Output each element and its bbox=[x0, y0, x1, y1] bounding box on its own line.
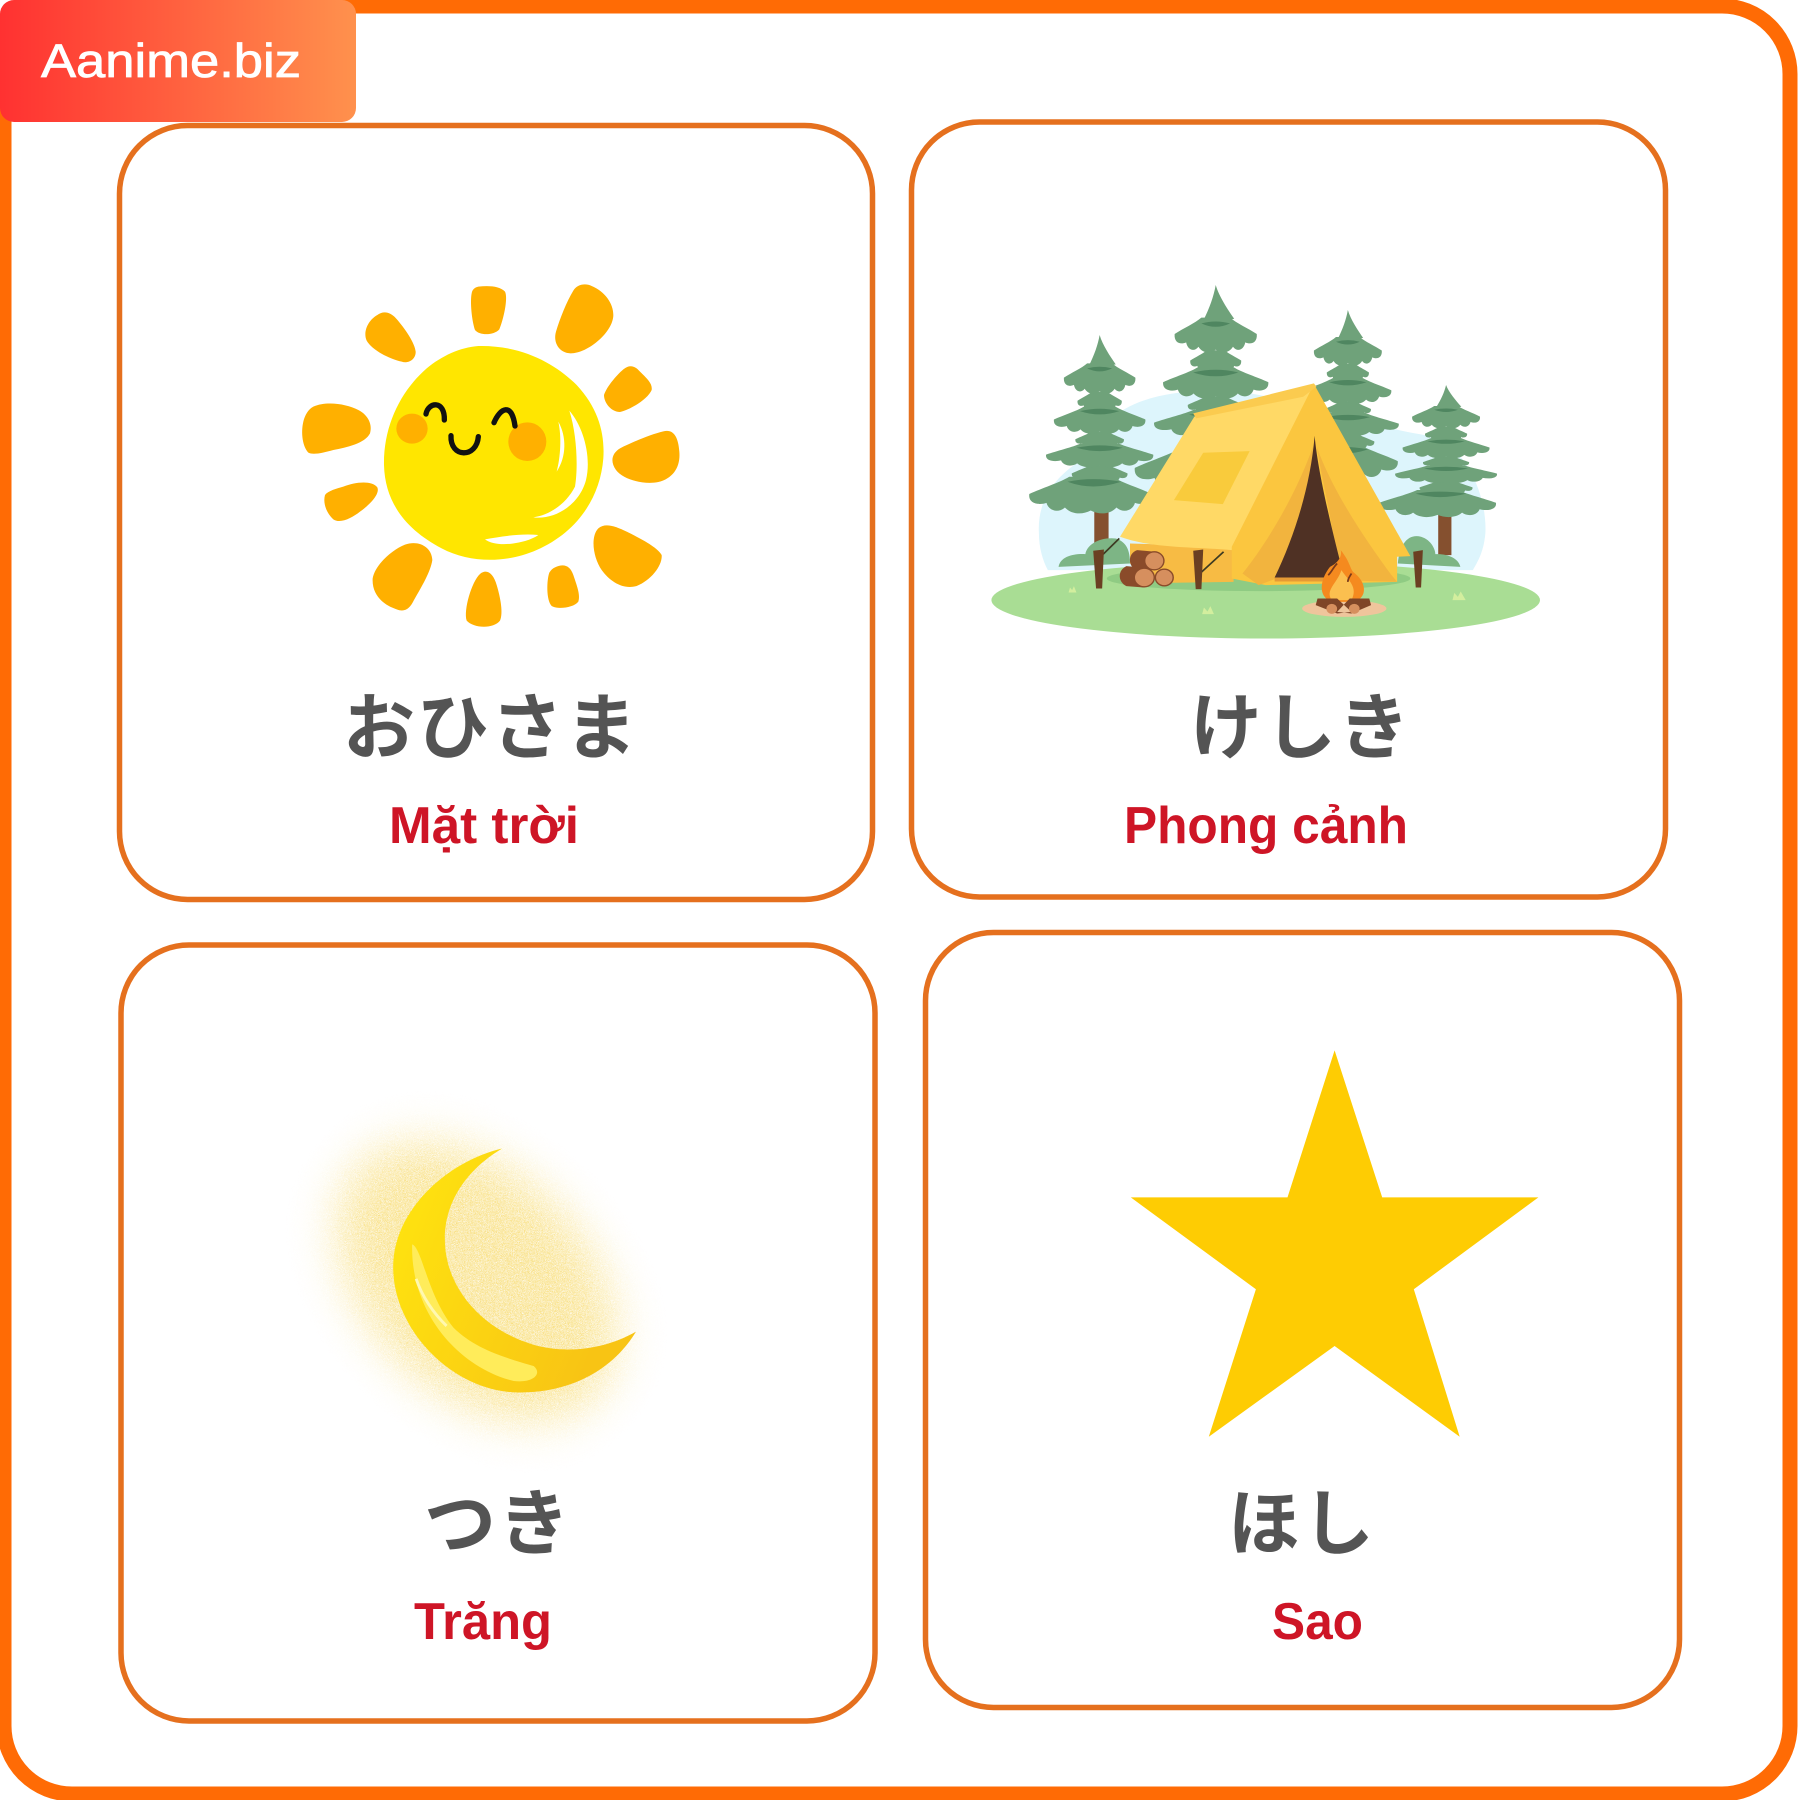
panel: scenery (けしき) bbox=[912, 122, 1666, 897]
vietnamese word: Trăng bbox=[414, 1593, 552, 1651]
japanese word: おひさま bbox=[343, 689, 639, 769]
tent bbox=[1120, 383, 1410, 585]
japanese word: つき bbox=[424, 1485, 572, 1565]
japanese word: けしき bbox=[1190, 689, 1412, 769]
ground bbox=[991, 562, 1540, 639]
japanese word: ほし bbox=[1228, 1485, 1376, 1565]
vietnamese word: Phong cảnh bbox=[1124, 797, 1408, 855]
brand badge bbox=[0, 0, 356, 122]
campfire bbox=[1302, 550, 1386, 617]
grass tufts bbox=[1069, 586, 1466, 614]
vietnamese word: Sao bbox=[1272, 1593, 1363, 1651]
brand badge: Aanime.biz bbox=[41, 34, 301, 87]
panel: sun (おひさま) bbox=[120, 126, 872, 900]
vietnamese word: Mặt trời bbox=[389, 797, 579, 855]
stakes and ropes bbox=[1093, 538, 1423, 589]
panel: moon (つき) bbox=[121, 945, 875, 1721]
log pile bbox=[1120, 550, 1173, 587]
icon: crescent moon with glow bbox=[284, 1089, 669, 1475]
panel: star (ほし) bbox=[926, 932, 1680, 1708]
icon: star bbox=[1131, 1050, 1538, 1437]
icon: smiling sun bbox=[302, 284, 679, 627]
icon: camping tent scene bbox=[991, 285, 1540, 639]
